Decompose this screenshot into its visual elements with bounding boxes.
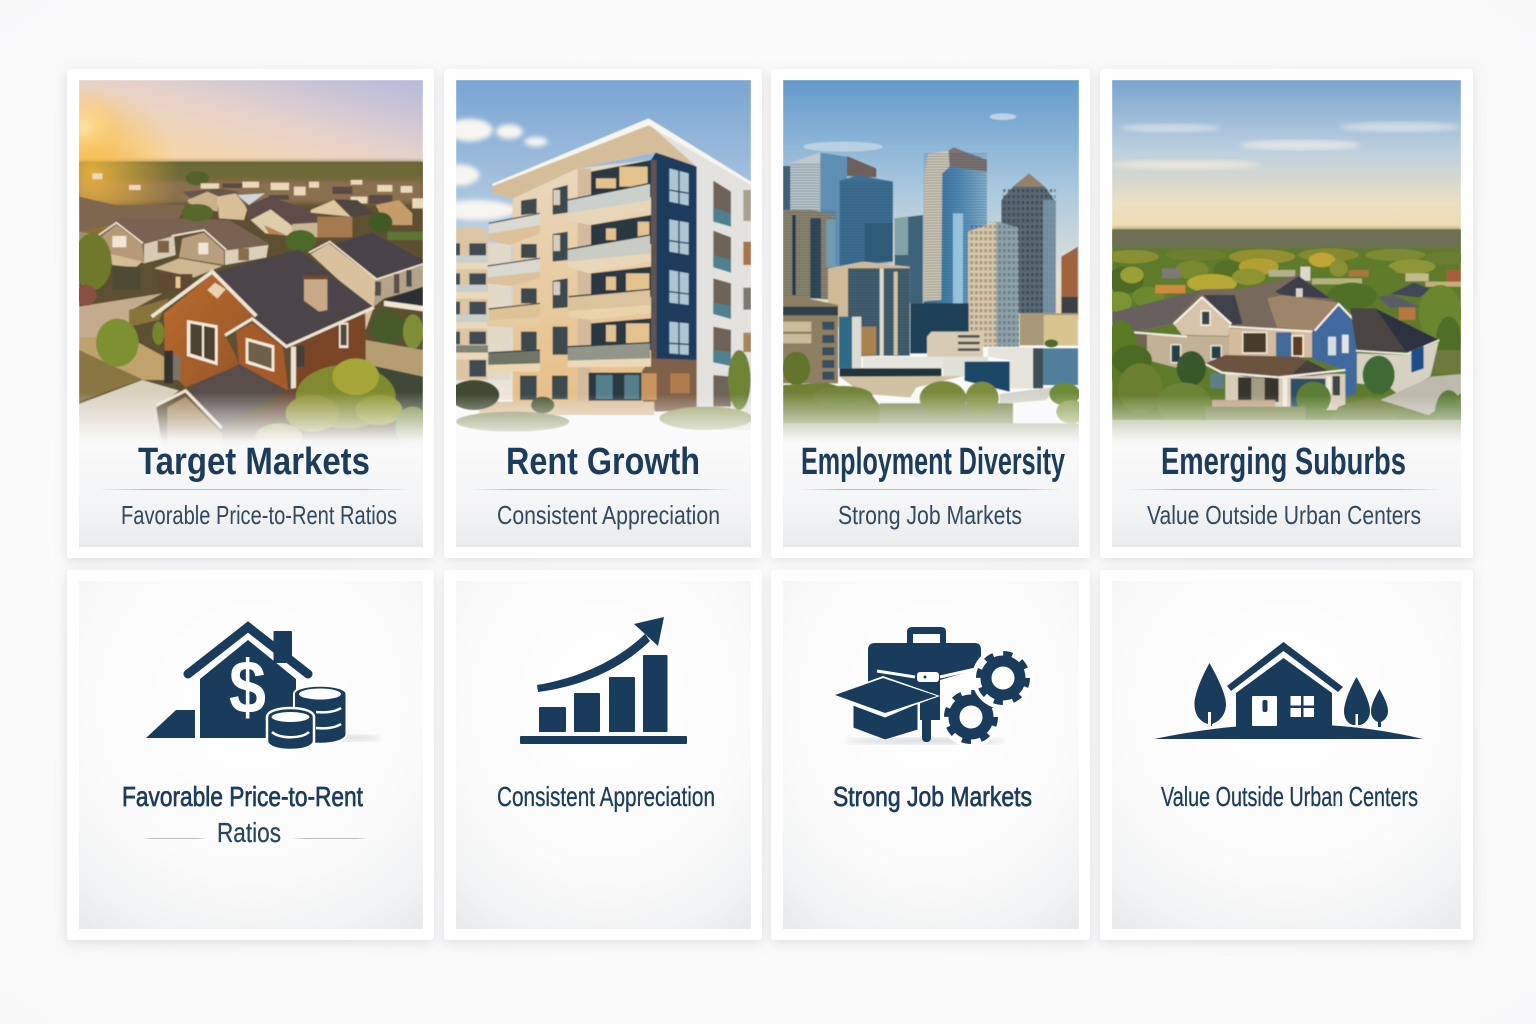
card: Value Outside Urban Centers icon xyxy=(1100,570,1473,940)
infographic canvas xyxy=(62,68,1478,948)
photo: suburban house with landscape xyxy=(1105,80,1465,456)
icon: house with dollar sign and coins xyxy=(146,627,380,750)
porch roof xyxy=(186,364,286,427)
label: Value Outside Urban Centers xyxy=(1161,781,1418,812)
heading: Rent Growth xyxy=(506,441,700,483)
main house xyxy=(212,249,374,347)
photo: suburban neighborhood at sunset xyxy=(79,80,423,441)
right tower xyxy=(1001,173,1056,313)
photo: downtown skyline xyxy=(782,80,1086,450)
subtitle: Strong Job Markets xyxy=(838,500,1022,530)
subtitle: Favorable Price-to-Rent Ratios xyxy=(121,500,397,530)
main beige body xyxy=(513,160,651,405)
roof slab xyxy=(493,124,696,198)
card: Emerging Suburbs xyxy=(1100,69,1473,558)
left block xyxy=(783,209,836,300)
far rooftops xyxy=(92,173,423,208)
trees and shrubs xyxy=(79,233,112,290)
left wing xyxy=(488,243,511,380)
left house xyxy=(96,218,270,251)
porch xyxy=(1225,374,1345,410)
right house xyxy=(335,232,423,278)
heading: Target Markets xyxy=(138,441,370,483)
foreground buildings xyxy=(783,295,838,383)
label: Favorable Price-to-Rent xyxy=(122,781,363,812)
center wall xyxy=(1229,328,1312,357)
brown right tower xyxy=(1061,247,1078,297)
tree field xyxy=(1105,248,1465,312)
heading: Employment Diversity xyxy=(801,441,1065,483)
left balconies xyxy=(489,213,540,234)
front tree xyxy=(296,365,396,428)
dark podium xyxy=(910,303,969,353)
photo: apartment building xyxy=(456,80,751,432)
garage wing xyxy=(1357,342,1439,395)
icon: house with dollar sign and coins: $ xyxy=(229,646,266,730)
label: Consistent Appreciation xyxy=(497,781,715,812)
landscaping xyxy=(479,402,654,415)
icon: rising bar chart with arrow xyxy=(520,617,687,744)
icon: house with trees on hill xyxy=(1154,642,1423,739)
cream tower xyxy=(968,222,1019,347)
heading: Emerging Suburbs xyxy=(1161,441,1406,483)
windows xyxy=(520,185,568,400)
icon: briefcase, graduation cap and gears xyxy=(832,627,1034,747)
card: Employment Diversity xyxy=(771,69,1090,558)
shrubs xyxy=(1177,351,1206,386)
back roof xyxy=(1136,274,1336,332)
left wall xyxy=(1147,335,1229,367)
middle house xyxy=(179,233,224,265)
subtitle: Value Outside Urban Centers xyxy=(1147,500,1421,530)
right white wing xyxy=(648,123,751,430)
card: Target Markets xyxy=(64,74,437,564)
navy column xyxy=(651,152,697,361)
grounds xyxy=(79,293,162,338)
card: Strong Job Markets icon xyxy=(771,570,1090,940)
right balconies xyxy=(568,183,650,213)
trees xyxy=(782,352,810,385)
blue section xyxy=(1312,305,1357,397)
card: Favorable Price-to-Rent Ratios icon: Ratios xyxy=(217,817,281,848)
card: Favorable Price-to-Rent Ratios icon xyxy=(67,570,434,940)
center-left block xyxy=(828,262,910,357)
back house rows xyxy=(79,197,186,232)
label: Strong Job Markets xyxy=(833,781,1032,812)
card: Consistent Appreciation icon xyxy=(444,570,762,940)
bays xyxy=(589,160,651,401)
subtitle: Consistent Appreciation xyxy=(497,500,720,530)
central tower xyxy=(922,166,988,304)
card: Rent Growth xyxy=(436,69,762,558)
